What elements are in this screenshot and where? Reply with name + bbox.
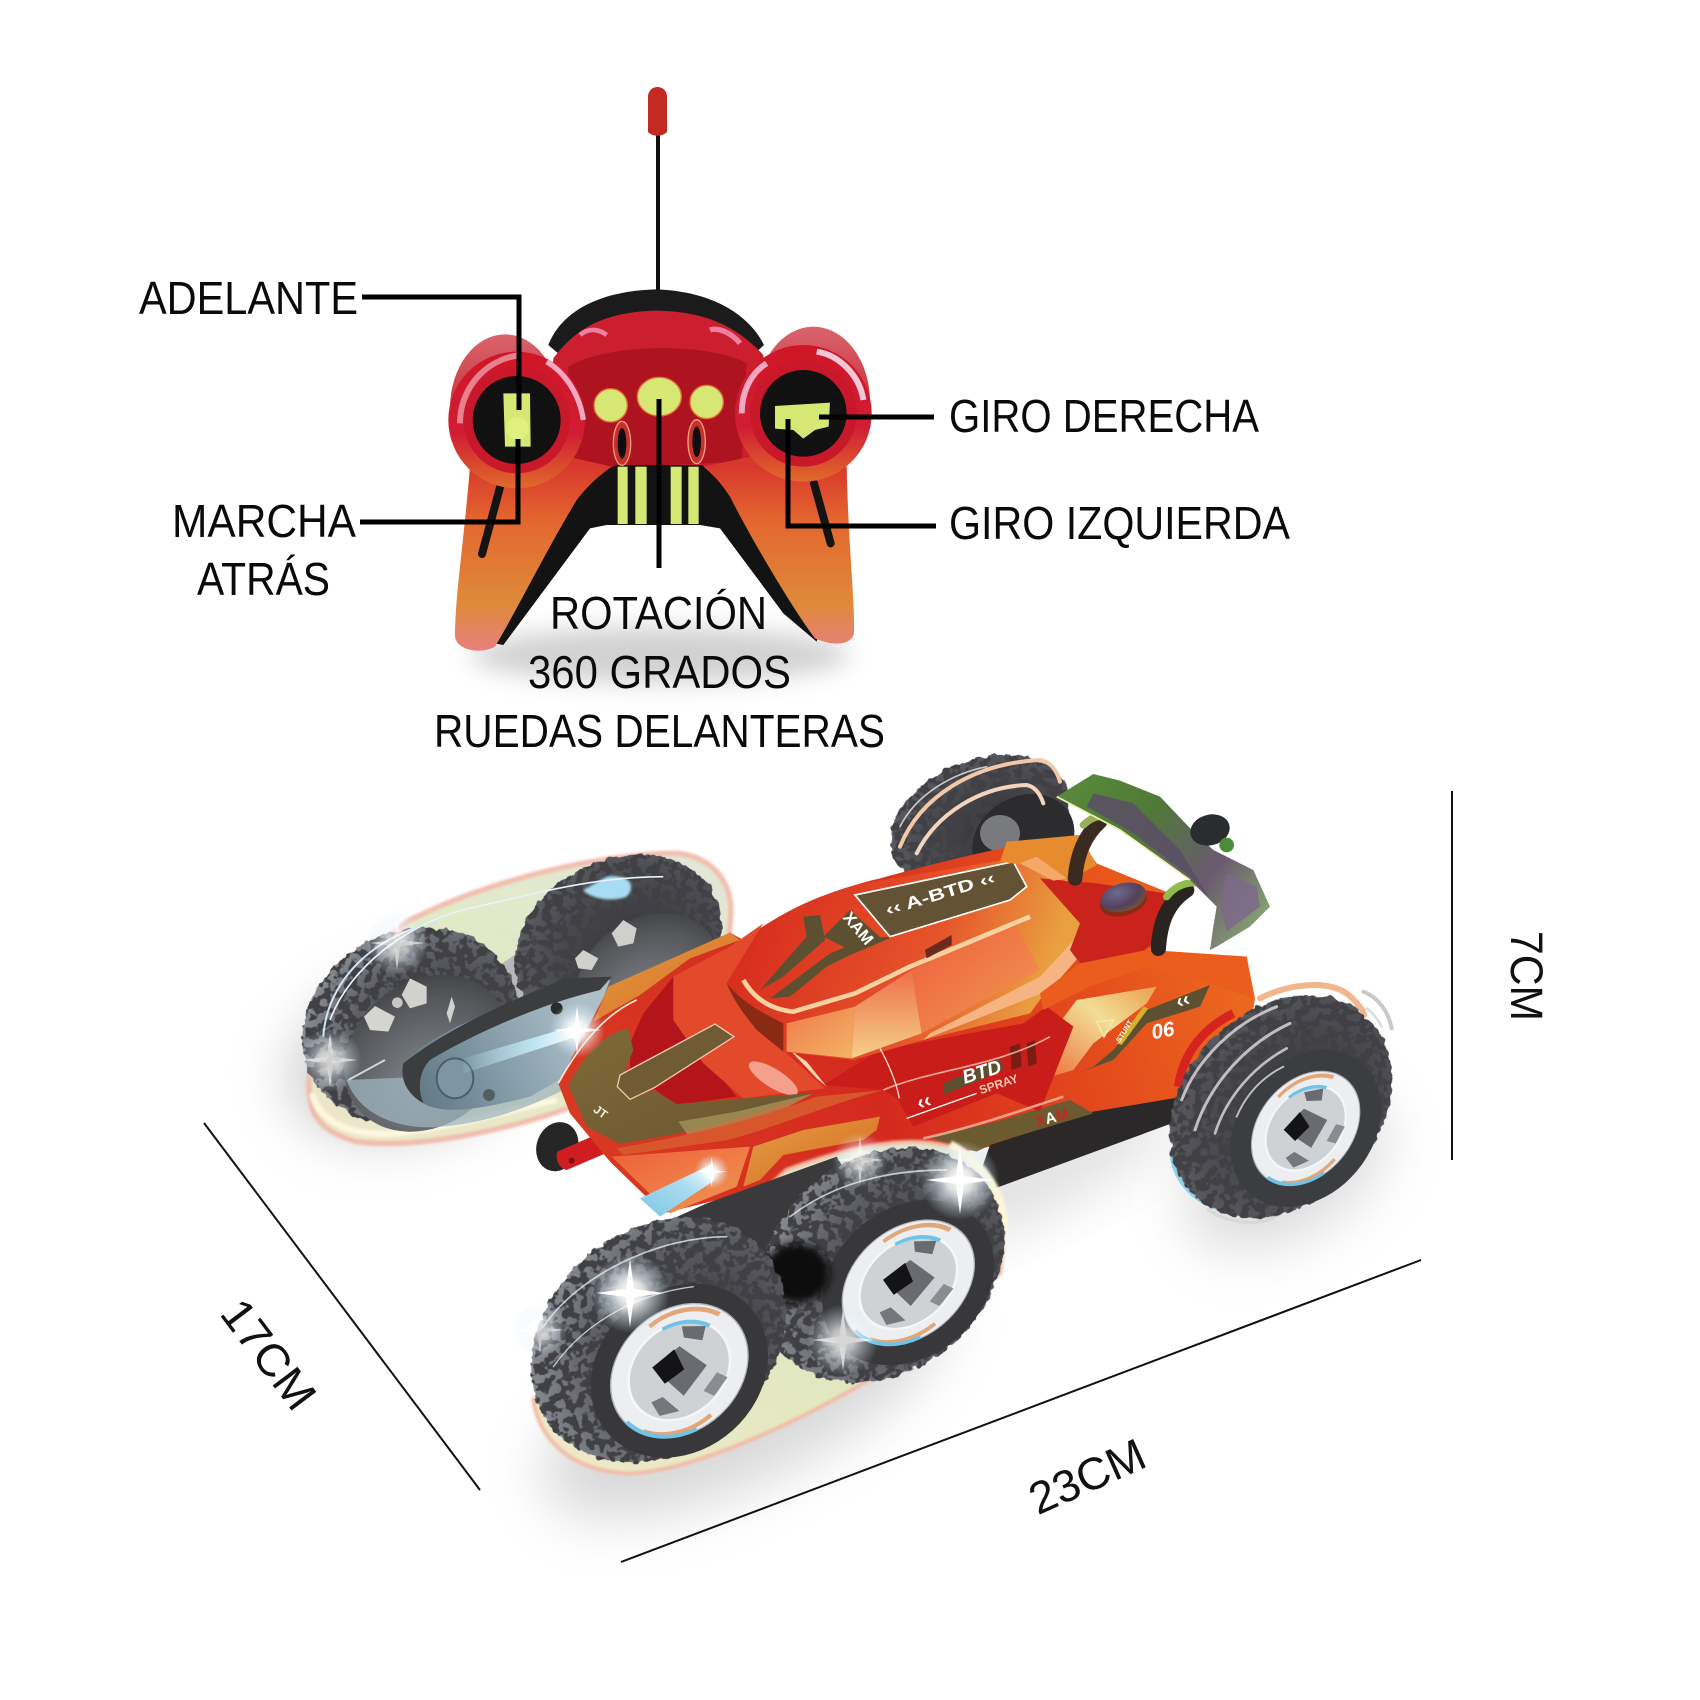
drop shadows — [266, 627, 1413, 1568]
dimension: length 23CM: 23CM — [1021, 1428, 1153, 1525]
light flares — [298, 911, 1000, 1376]
spoiler legs — [1075, 816, 1205, 948]
rear near wheel — [1125, 951, 1437, 1263]
lower side stripe with XAM: XAM — [1033, 1105, 1071, 1131]
rear disc — [1097, 878, 1150, 921]
black chassis — [977, 1097, 1190, 1188]
label: ROTACIÓN 360 GRADOS RUEDAS DELANTERAS: 360 GRADOS — [528, 646, 791, 698]
wheel arch — [1178, 1013, 1233, 1087]
back-left tire — [483, 819, 754, 1071]
spoiler — [1057, 774, 1270, 950]
car body — [529, 835, 1255, 1217]
roof plate: XAM — [839, 908, 877, 949]
label: GIRO DERECHA: GIRO DERECHA — [949, 390, 1259, 442]
label: ROTACIÓN 360 GRADOS RUEDAS DELANTERAS: RUEDAS DELANTERAS — [434, 705, 885, 757]
label: GIRO IZQUIERDA: GIRO IZQUIERDA — [949, 497, 1290, 549]
lower gold fender — [743, 1117, 880, 1187]
remote control — [360, 87, 936, 651]
stunt car — [268, 730, 1437, 1513]
dimension: height 7CM: 7CM — [1501, 931, 1552, 1021]
dark gap between tires — [763, 1243, 830, 1303]
front-left tire — [268, 890, 552, 1160]
nose cavity — [630, 977, 737, 1105]
nose panel — [673, 923, 825, 1098]
side red panel: SPRAY — [977, 1071, 1020, 1097]
lower side stripe with XAM — [927, 1100, 1093, 1152]
roof plate — [839, 862, 1027, 949]
dimension: width 17CM — [204, 1123, 480, 1490]
slots — [482, 420, 831, 554]
spoiler wing — [1057, 774, 1270, 950]
rear side stripes — [1077, 985, 1210, 1073]
rear front-side tire — [712, 1099, 1051, 1431]
headlight beam and flares — [640, 1154, 729, 1217]
front olive shield — [568, 1028, 817, 1144]
left fender — [593, 933, 740, 1022]
canopy — [727, 857, 1097, 1060]
front tire — [482, 1167, 835, 1513]
rear side stripes: 06 — [1150, 1017, 1177, 1044]
side red panel: BTD — [960, 1057, 1004, 1089]
label: ROTACIÓN 360 GRADOS RUEDAS DELANTERAS — [434, 587, 885, 757]
rear deck — [1000, 835, 1253, 1010]
body shell — [558, 835, 1255, 1213]
arm linking wheels — [402, 980, 610, 1110]
label: MARCHA ATRÁS: ATRÁS — [197, 553, 330, 605]
front wheels with motion trail — [482, 1099, 1051, 1513]
dimension: width 17CM: 17CM — [211, 1289, 327, 1420]
rear far wheel — [870, 730, 1091, 914]
lower pale blue band — [347, 1047, 580, 1127]
left grip — [455, 453, 612, 651]
rear fender yellow patch — [1040, 987, 1157, 1080]
lower front panel — [612, 1147, 750, 1213]
right joystick — [735, 327, 872, 482]
black inner grip — [495, 465, 818, 645]
label: ADELANTE: ADELANTE — [139, 272, 358, 324]
lower reflective strip — [617, 1090, 883, 1155]
front scoop — [617, 1024, 734, 1099]
roof chevron marks — [760, 910, 893, 998]
remote body — [448, 289, 872, 651]
white accent lines — [558, 1000, 1050, 1098]
side red panel: ‹‹ — [914, 1089, 934, 1115]
spoiler small wheel — [1187, 810, 1234, 852]
antenna — [648, 87, 667, 296]
left joystick — [448, 334, 585, 488]
label: MARCHA ATRÁS — [172, 495, 356, 605]
green stripes — [618, 467, 699, 524]
right grip — [703, 453, 854, 644]
front small wheel — [529, 1116, 613, 1177]
leader lines — [360, 297, 936, 568]
rear side stripes: STUNT — [1114, 1018, 1135, 1044]
shield light overlay — [678, 1093, 813, 1138]
label: MARCHA ATRÁS: MARCHA — [172, 495, 356, 547]
roof plate: ‹‹ A-BTD ‹‹ — [883, 868, 997, 919]
rear side stripes: ‹‹ — [1173, 988, 1193, 1013]
label: ROTACIÓN 360 GRADOS RUEDAS DELANTERAS: ROTACIÓN — [550, 587, 767, 639]
JT mark: JT — [591, 1102, 611, 1122]
dimension: length 23CM — [621, 1260, 1421, 1562]
left wheels with motion trail — [268, 819, 754, 1164]
buttons — [594, 377, 723, 422]
side red panel — [823, 1007, 1073, 1138]
